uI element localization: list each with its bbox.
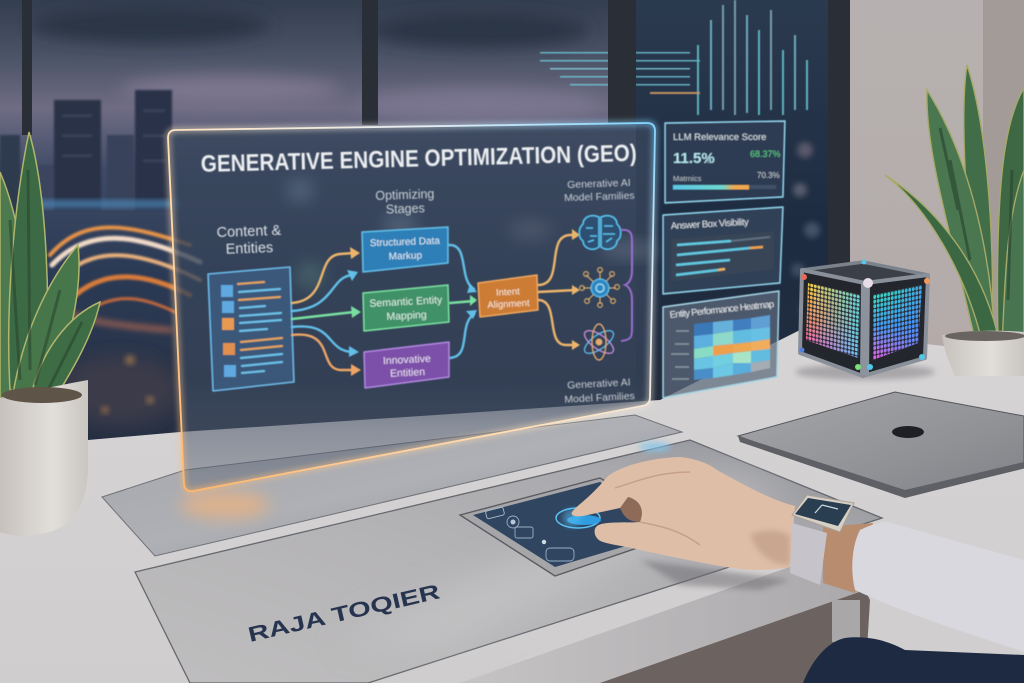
LED cube xyxy=(795,260,935,380)
left plant xyxy=(0,132,100,536)
column label: content and entities: Entities xyxy=(225,240,273,258)
desk leg xyxy=(832,600,860,642)
data streaks in the air xyxy=(540,0,808,115)
stage: semantic entity mapping xyxy=(363,285,449,331)
heatmap grid xyxy=(694,315,770,380)
window frames xyxy=(22,0,850,340)
icon: network node xyxy=(580,268,619,307)
metric card: LLM relevance score xyxy=(665,121,785,203)
stage: structured data markup xyxy=(362,227,448,272)
metric card: LLM relevance score: 70.3% xyxy=(757,171,780,180)
horizon glow xyxy=(30,200,180,208)
person torso xyxy=(803,637,1024,683)
stage: innovative entities xyxy=(364,342,449,388)
wall xyxy=(845,0,1024,400)
column label: model families top: Model Families xyxy=(564,190,635,204)
hand xyxy=(572,457,795,590)
metric card: LLM relevance score: 68.37% xyxy=(750,149,781,159)
metric card: LLM relevance score: 8 xyxy=(707,158,711,165)
highway light trails xyxy=(45,228,200,330)
city buildings xyxy=(0,90,172,215)
metric card: entity performance heatmap xyxy=(663,291,779,398)
bracket xyxy=(621,230,632,341)
LED face left xyxy=(806,283,860,358)
floor under desk xyxy=(600,590,870,683)
stage: intent alignment: Alignment xyxy=(487,298,530,311)
desk front face xyxy=(460,535,900,683)
metal base plate under hologram xyxy=(102,415,682,556)
window with dusk city view xyxy=(0,0,850,450)
stage: semantic entity mapping: Semantic Entity xyxy=(369,294,443,310)
metric card: LLM relevance score: LLM Relevance Score xyxy=(673,132,766,143)
smartwatch xyxy=(790,495,854,585)
right plant xyxy=(885,65,1024,376)
LED face right xyxy=(873,285,922,360)
arrowheads xyxy=(347,229,580,376)
shirt sleeve xyxy=(852,522,1024,652)
wrist xyxy=(823,523,873,593)
metric card: answer box visibility xyxy=(663,207,783,294)
stage: innovative entities: Entitien xyxy=(390,366,425,380)
stage: intent alignment: Intent xyxy=(496,286,520,299)
stage: structured data markup: Markup xyxy=(389,250,423,263)
column label: optimizing stages: Optimizing xyxy=(375,187,435,203)
column label: model families top: Generative AI xyxy=(567,177,631,191)
column label: model families bottom: Generative AI xyxy=(567,376,631,392)
panel title: GENERATIVE ENGINE OPTIMIZATION (GEO) xyxy=(200,140,637,178)
laptop xyxy=(738,392,1024,498)
wall corner shadow xyxy=(983,0,1024,400)
touch control pad xyxy=(460,478,690,576)
stage: intent alignment xyxy=(478,275,538,317)
arrows from content to stages xyxy=(292,235,576,370)
desk xyxy=(0,330,1024,683)
icon: atom xyxy=(581,324,617,360)
stage: innovative entities: Innovative xyxy=(383,353,431,367)
stage: semantic entity mapping: Mapping xyxy=(386,309,427,323)
column label: model families bottom: Model Families xyxy=(564,390,635,406)
metric card: answer box visibility: Answer Box Visibility xyxy=(671,217,749,232)
icon: brain xyxy=(579,216,621,249)
metric card: entity performance heatmap: Entity Performance Heatmap xyxy=(669,299,775,321)
hologram panel xyxy=(168,123,660,491)
stage: structured data markup: Structured Data xyxy=(370,236,441,249)
metric card: LLM relevance score: Matrnics xyxy=(673,174,702,183)
column label: content and entities: Content & xyxy=(216,223,282,241)
metal desk plate xyxy=(135,440,882,683)
column label: optimizing stages: Stages xyxy=(386,201,425,217)
name engraved on plate: RAJA TOQIER xyxy=(246,580,442,647)
document card xyxy=(208,267,294,391)
metric card: LLM relevance score: 11.5% xyxy=(673,150,715,167)
